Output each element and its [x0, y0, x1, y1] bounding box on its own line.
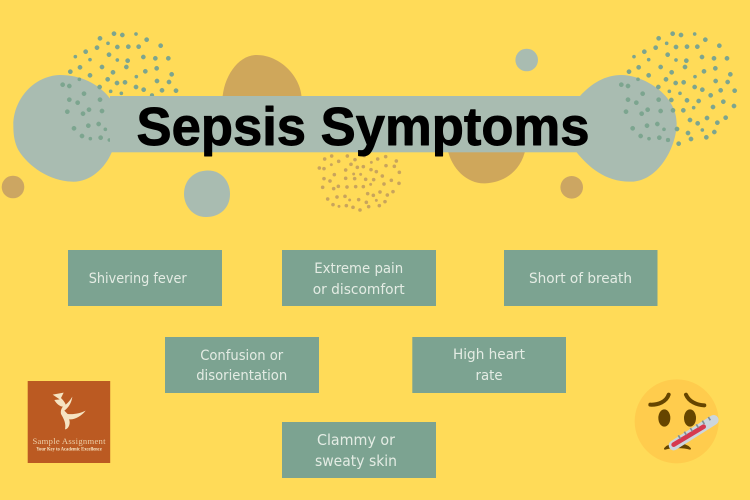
- symptom box: confusion: Confusion or: [200, 348, 283, 364]
- symptom box: clammy skin: [282, 422, 436, 478]
- logo: Sample Assignment: [28, 381, 110, 463]
- symptom box: extreme pain: Extreme pain: [314, 261, 403, 277]
- icon: face with thermometer: [635, 379, 719, 463]
- small grey blob right: [515, 49, 538, 71]
- title band: [110, 96, 586, 152]
- symptom box: high heart rate: [412, 337, 566, 393]
- symptom box: clammy skin: Clammy or: [317, 431, 396, 449]
- dot cluster below title: [318, 154, 401, 212]
- symptom box: short of breath: Short of breath: [529, 271, 632, 287]
- symptom box: high heart rate: rate: [476, 368, 503, 384]
- tan blob top centre: [222, 55, 302, 100]
- symptom box: confusion: disorientation: [196, 368, 287, 384]
- small tan blob left: [2, 176, 24, 198]
- symptom box: extreme pain: or discomfort: [313, 282, 405, 298]
- symptom box: short of breath: [504, 250, 658, 306]
- title band blob left: [13, 75, 112, 182]
- logo tagline: Your Key to Academic Excellence: [36, 448, 102, 452]
- symptom box: shivering fever: [68, 250, 222, 306]
- symptom box: extreme pain: [282, 250, 436, 306]
- small grey blob left: [184, 170, 230, 217]
- title: Sepsis Symptoms: [136, 97, 590, 157]
- logo wordmark: Sample Assignment: [32, 436, 106, 446]
- logo figure: [53, 393, 86, 429]
- symptom box: high heart rate: High heart: [453, 347, 525, 363]
- symptom box: clammy skin: sweaty skin: [315, 452, 397, 470]
- dot cluster top right: [619, 31, 737, 146]
- tan blob lower right of title: [447, 148, 526, 183]
- dot cluster top left: [60, 31, 178, 142]
- title band blob right: [577, 75, 677, 182]
- symptom box: shivering fever: Shivering fever: [89, 271, 187, 287]
- symptom box: confusion: [165, 337, 319, 393]
- small tan blob right: [560, 176, 583, 199]
